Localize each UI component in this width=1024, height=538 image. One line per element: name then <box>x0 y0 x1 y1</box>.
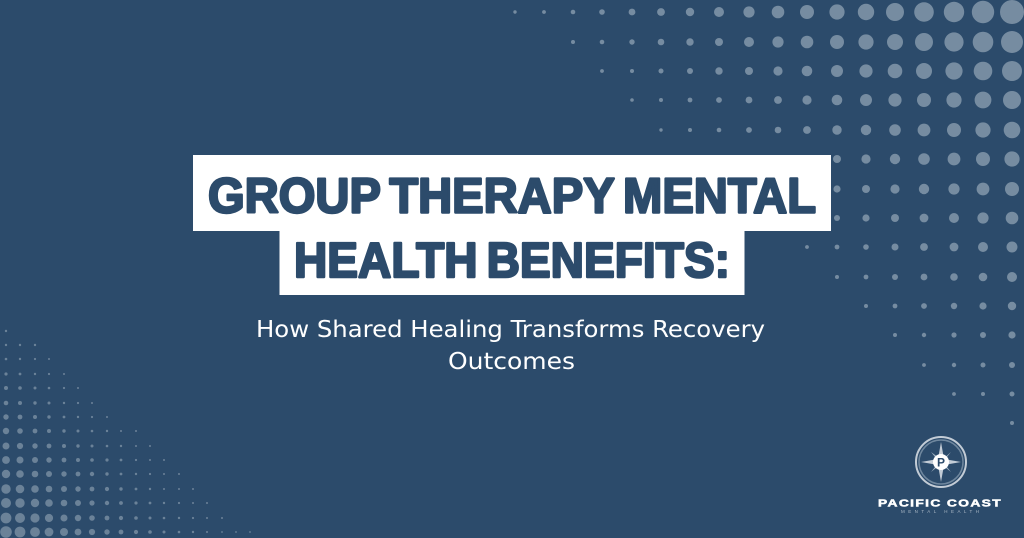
icon: compass: P <box>937 456 945 470</box>
logo tagline: MENTAL HEALTH <box>901 509 979 514</box>
logo: Pacific Coast Mental Health <box>878 437 1002 514</box>
subtitle: How Shared Healing Transforms Recovery <box>256 317 765 343</box>
subtitle: Outcomes <box>448 349 575 375</box>
halftone dots: top right <box>513 0 1024 425</box>
halftone dots: bottom left <box>0 330 251 538</box>
title: HEALTH BENEFITS: <box>294 234 730 288</box>
logo wordmark: PACIFIC COAST <box>878 498 1002 510</box>
subtitle <box>256 317 765 375</box>
title <box>208 170 816 288</box>
title panel: white stepped highlight <box>193 155 831 295</box>
title: GROUP THERAPY MENTAL <box>208 170 816 224</box>
